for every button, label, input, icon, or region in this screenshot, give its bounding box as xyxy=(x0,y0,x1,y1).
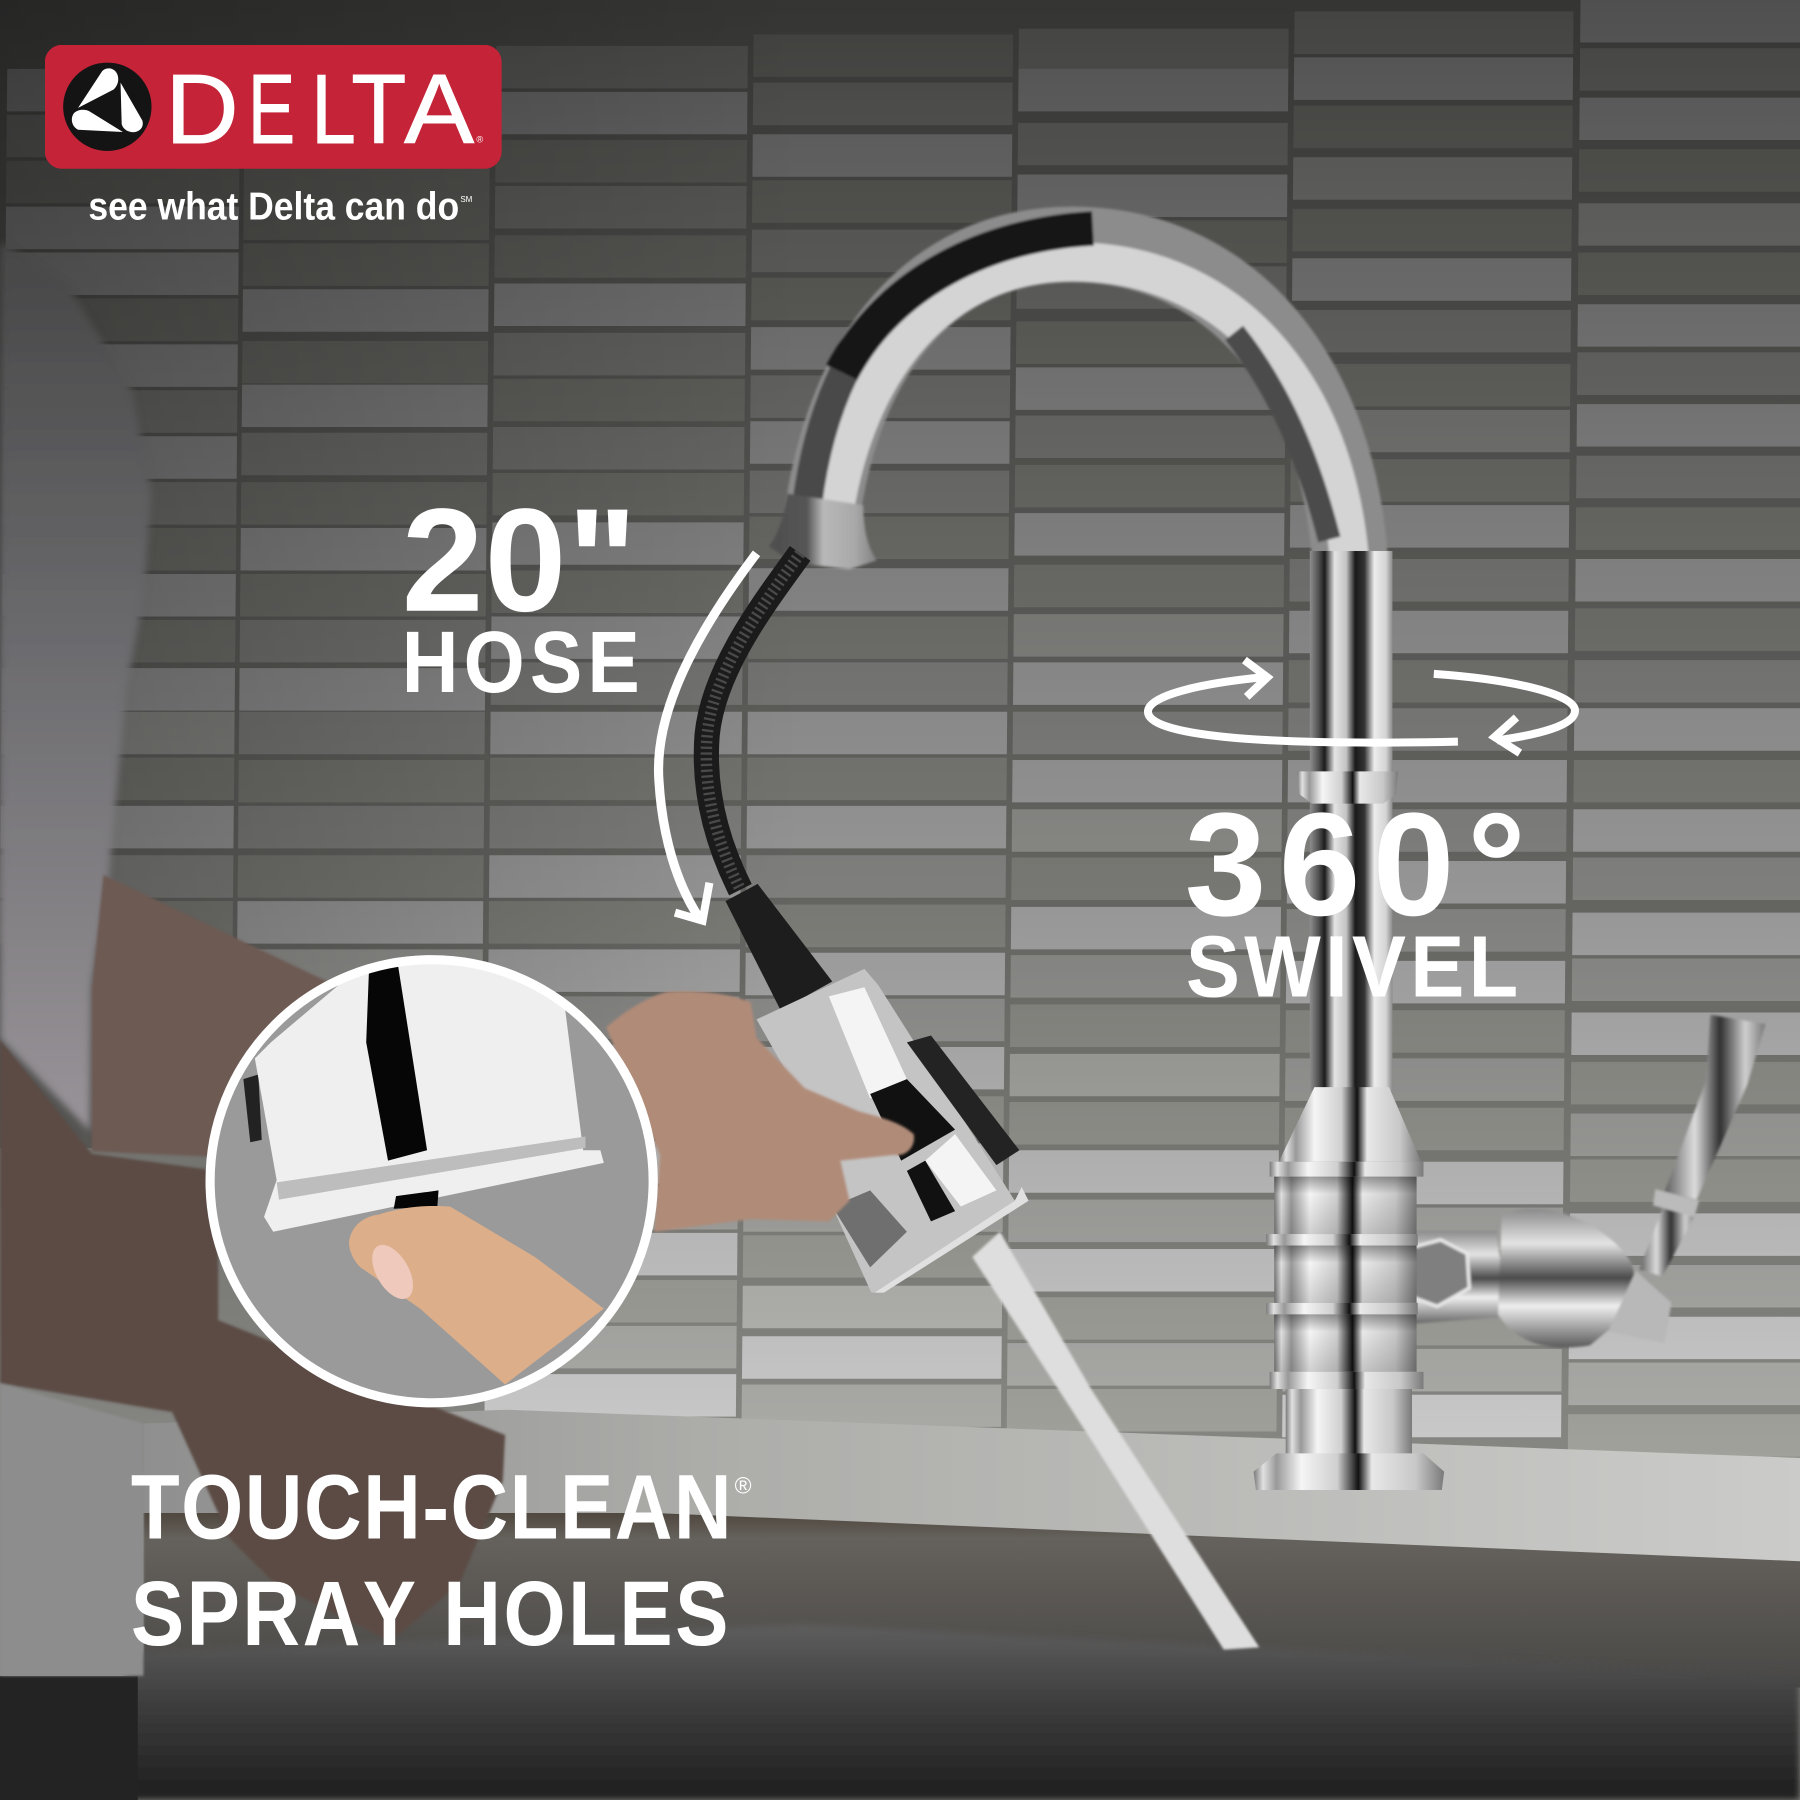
faucet: handle and lever xyxy=(1376,1015,1766,1348)
callout: 20 inch hose xyxy=(402,479,645,711)
counter and sink xyxy=(0,1410,1800,1800)
callout: 20 inch hose: 20" xyxy=(402,479,637,643)
faucet: neck and swivel collar xyxy=(1297,551,1398,1091)
faucet: base body xyxy=(1254,1087,1444,1490)
callout: touch-clean spray holes: SPRAY HOLES xyxy=(131,1563,731,1665)
person: sleeve and arms xyxy=(0,241,505,1676)
arrow: hose reach xyxy=(659,553,757,921)
inset: touch-clean detail xyxy=(210,941,653,1403)
fingertip xyxy=(349,1206,604,1384)
callout: 20 inch hose: HOSE xyxy=(402,613,645,711)
pull-down sprayer xyxy=(726,884,1029,1293)
faucet: gooseneck spout xyxy=(769,228,1351,804)
callout: 360 degree swivel: ° xyxy=(1467,783,1526,947)
logo: Delta badge xyxy=(45,45,502,169)
hand holding the sprayer xyxy=(606,991,914,1232)
tagline: see what Delta can do xyxy=(88,185,459,228)
callout: touch-clean spray holes: TOUCH-CLEAN xyxy=(131,1456,733,1559)
wordmark: L xyxy=(311,54,356,164)
hose xyxy=(706,553,800,890)
sprayer face xyxy=(255,941,604,1232)
wordmark: T xyxy=(351,54,406,164)
arrows: swivel rotation xyxy=(1148,660,1575,753)
wordmark xyxy=(165,54,474,164)
callout: 360 degree swivel: 360 xyxy=(1185,783,1454,947)
water stream xyxy=(972,1232,1259,1650)
callout: 360 degree swivel xyxy=(1185,783,1526,1015)
logo: Delta badge: ® xyxy=(476,134,483,144)
wordmark: E xyxy=(248,54,295,164)
callout: 360 degree swivel: SWIVEL xyxy=(1186,918,1522,1015)
callout: touch-clean spray holes: ® xyxy=(735,1472,752,1498)
wordmark: D xyxy=(165,54,239,164)
tagline: SM xyxy=(460,195,473,204)
callout: touch-clean spray holes xyxy=(131,1456,752,1665)
icon: Delta triangle mark xyxy=(63,63,152,151)
wordmark: A xyxy=(404,54,474,164)
